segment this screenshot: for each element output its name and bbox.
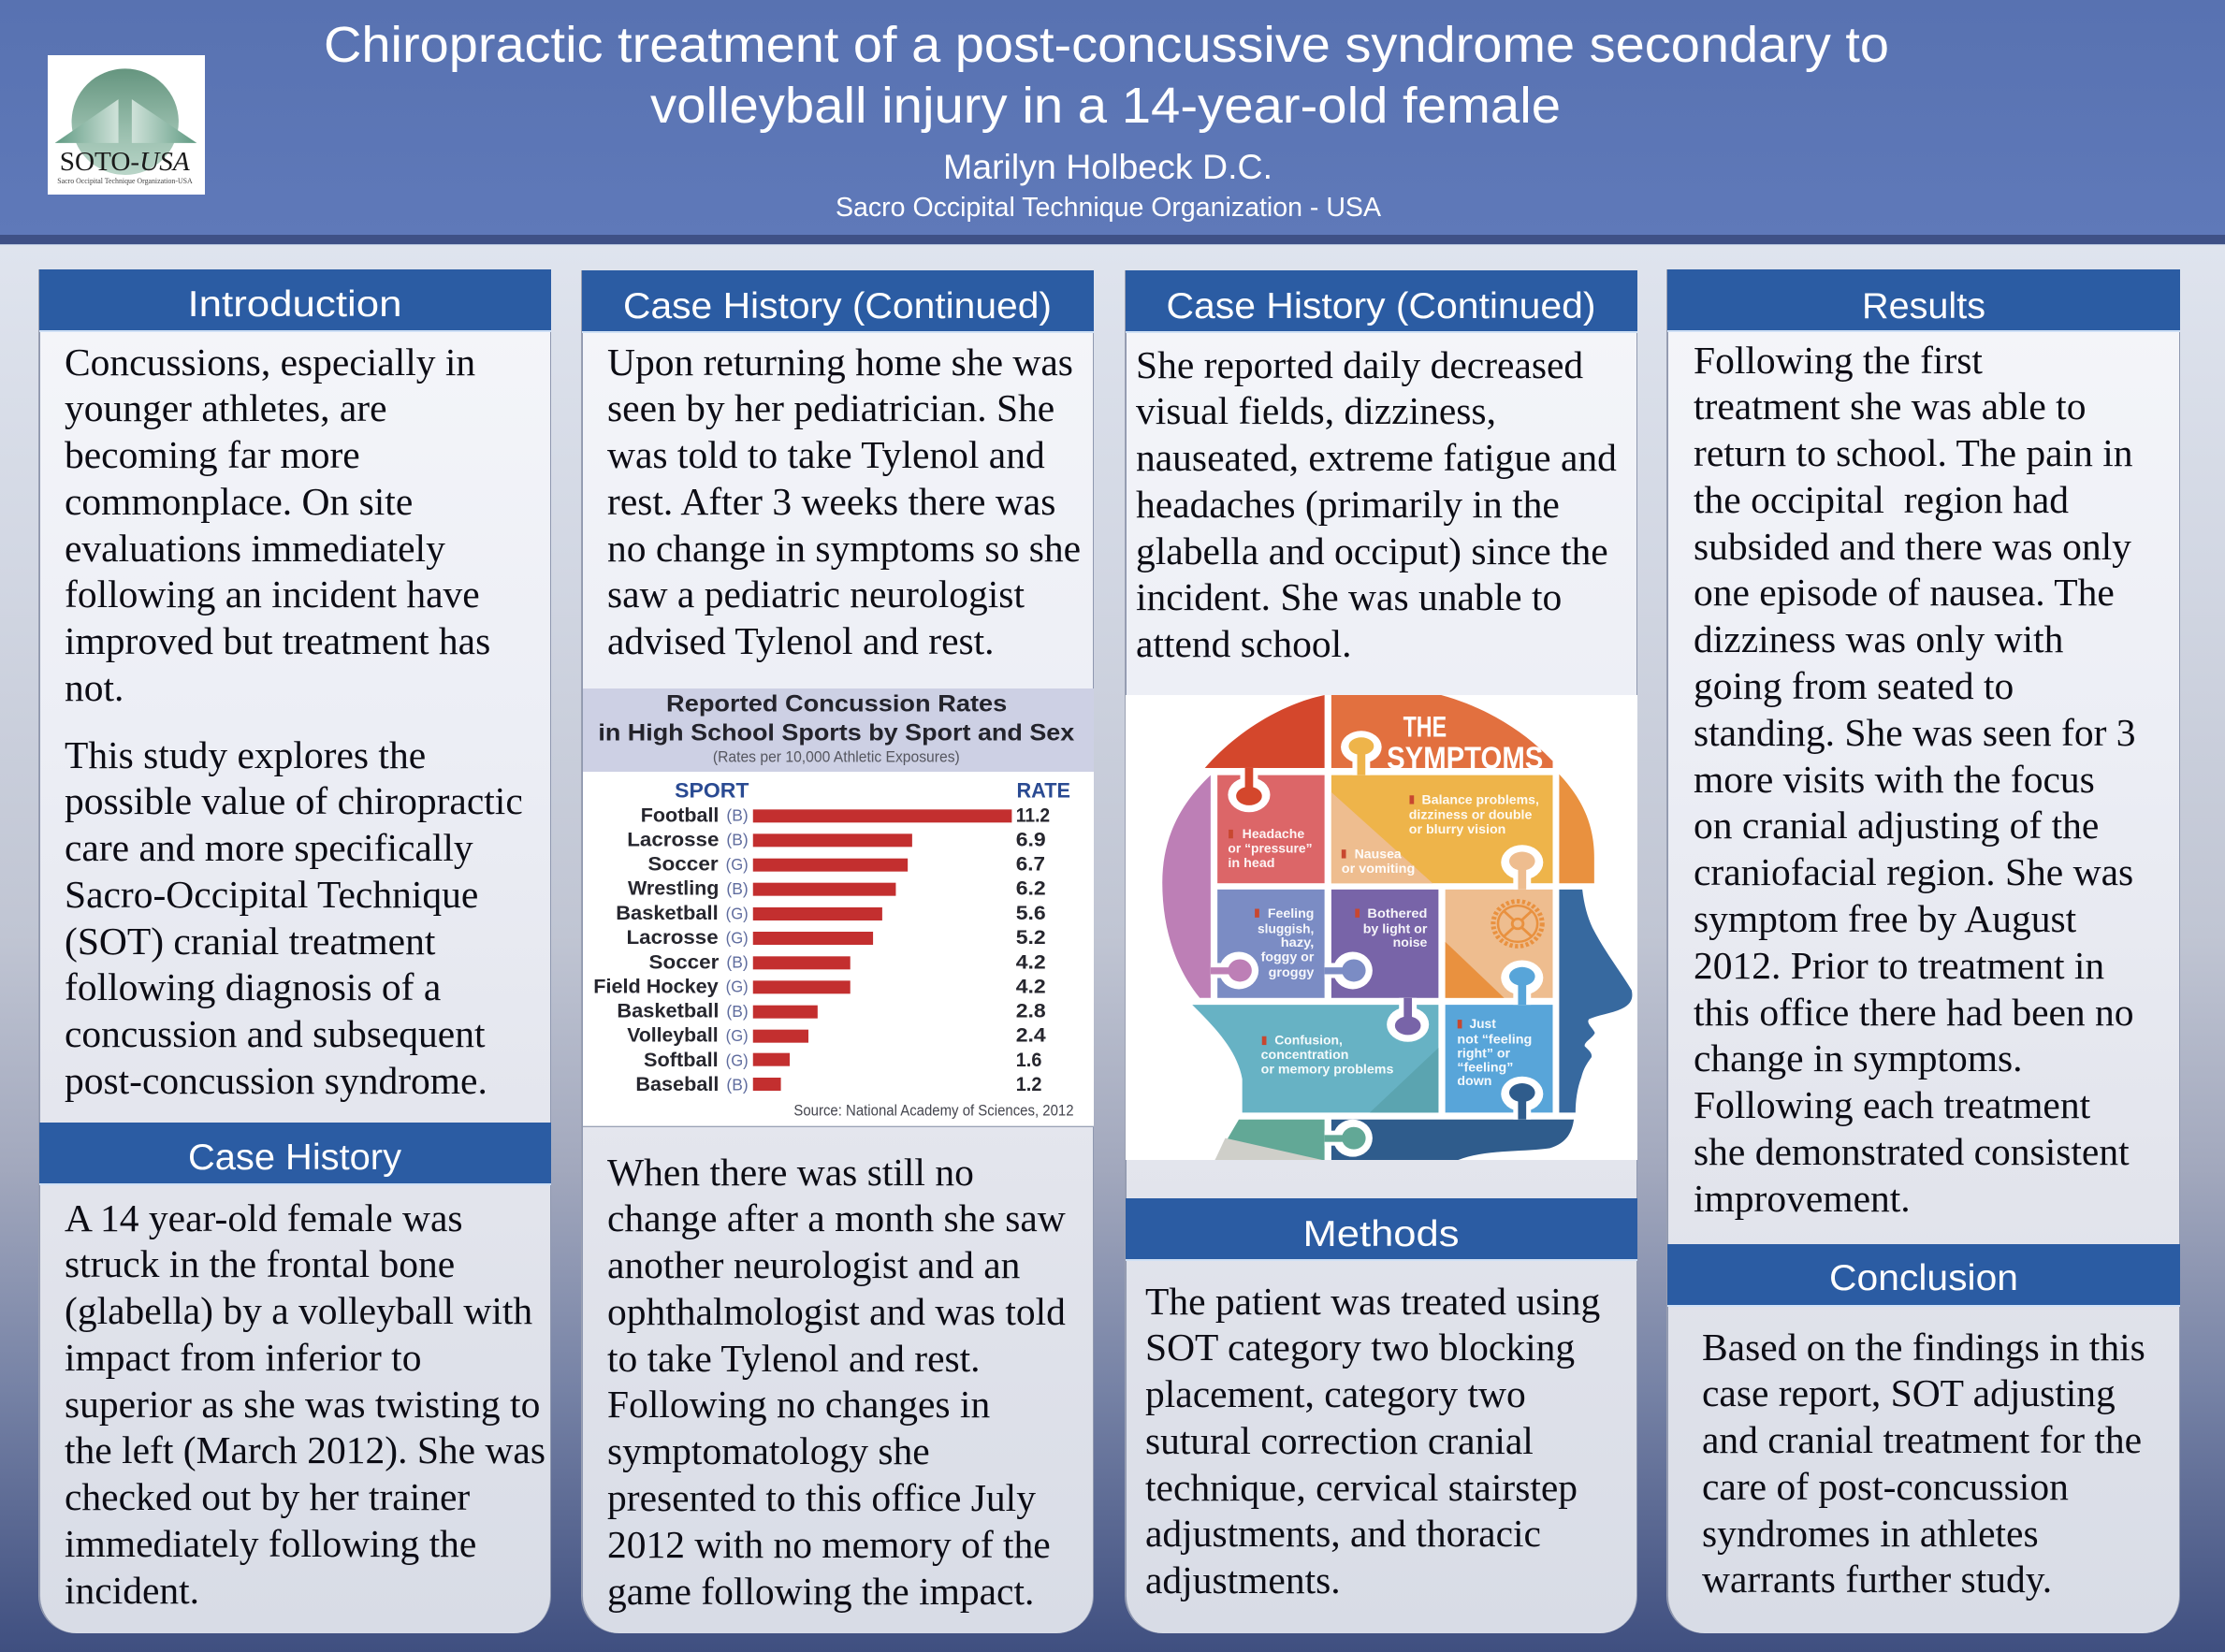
- symptom labels: “feeling”: [1457, 1061, 1513, 1075]
- text: methods: sutural correction cranial: [1145, 1419, 1534, 1462]
- text: results: the occipital region had: [1694, 478, 2069, 521]
- heading: Results: Results: [1862, 286, 1985, 326]
- text: introduction paragraph 1: commonplace. On site: [65, 480, 413, 523]
- heading: Case History (Continued): [582, 270, 1094, 333]
- heading: the symptoms: [1387, 710, 1543, 775]
- sport labels: Field Hockey: [593, 975, 719, 997]
- text: results: more visits with the focus: [1694, 758, 2095, 801]
- panel: column 1: [39, 269, 551, 1633]
- symptom labels: Bothered: [1367, 906, 1427, 921]
- text: introduction paragraph 1: not.: [65, 666, 124, 709]
- symptom labels: Confusion,: [1274, 1034, 1343, 1049]
- text: case history: [65, 1196, 545, 1612]
- heading: Case History (Continued): Case History (Continued): [1166, 286, 1596, 326]
- text: methods: SOT category two blocking: [1145, 1326, 1575, 1369]
- symptom labels: in head: [1228, 856, 1275, 871]
- sex labels: (G): [726, 1051, 749, 1069]
- text: case history continued 1: saw a pediatric neurologist: [607, 572, 1025, 616]
- rate values: 5.6: [1016, 902, 1046, 924]
- text: case history: A 14 year-old female was: [65, 1196, 463, 1239]
- text: case history continued 2: symptomatology she: [607, 1429, 930, 1472]
- heading: Methods: [1126, 1198, 1637, 1261]
- text: conclusion: warrants further study.: [1702, 1558, 2052, 1601]
- text: case history continued 3: She reported daily decreased: [1136, 342, 1583, 385]
- title and author block: [324, 17, 1889, 223]
- sex labels: (B): [726, 1076, 749, 1094]
- text: results: Following each treatment: [1694, 1083, 2090, 1126]
- heading: Conclusion: Conclusion: [1829, 1258, 2018, 1298]
- sex labels: (B): [726, 831, 749, 848]
- heading: Case History: [39, 1123, 551, 1185]
- heading: Introduction: Introduction: [187, 284, 402, 325]
- text: introduction paragraph 1: evaluations immediately: [65, 527, 445, 570]
- symptom labels: Headache: [1243, 828, 1304, 842]
- text: case history: superior as she was twisting to: [65, 1383, 540, 1426]
- text: methods: [1145, 1280, 1600, 1601]
- text: results: standing. She was seen for 3: [1694, 711, 2136, 754]
- text: case history continued 2: change after a month she saw: [607, 1196, 1066, 1239]
- text: introduction paragraph 2: possible value of chiropractic: [65, 779, 523, 822]
- symptom labels: or “pressure”: [1228, 842, 1313, 856]
- text: introduction paragraph 2: This study explores the: [65, 733, 426, 776]
- text: case history continued 1: no change in symptoms so she: [607, 527, 1081, 570]
- column headers: SPORT: [675, 778, 749, 802]
- sport labels: Lacrosse: [627, 828, 719, 850]
- rate values: 4.2: [1016, 950, 1046, 973]
- text: introduction paragraph 2: (SOT) cranial treatment: [65, 920, 435, 963]
- text: introduction paragraph 2: Sacro-Occipital Technique: [65, 873, 478, 916]
- symptom labels: dizziness or double: [1409, 808, 1532, 822]
- text: case history continued 1: [607, 341, 1081, 662]
- text: conclusion: Based on the findings in this: [1702, 1325, 2145, 1368]
- text: case history continued 1: advised Tylenol and rest.: [607, 619, 995, 662]
- text: introduction paragraph 2: following diagnosis of a: [65, 965, 441, 1008]
- symptom labels: by light or: [1363, 922, 1428, 936]
- sport labels: Soccer: [649, 950, 720, 973]
- header band: [0, 0, 2225, 235]
- text: results: this office there had been no: [1694, 991, 2134, 1034]
- author: Marilyn Holbeck D.C.: [943, 148, 1272, 186]
- rate values: 6.9: [1016, 828, 1046, 850]
- heading: Case History: Case History: [188, 1138, 401, 1178]
- text: case history: impact from inferior to: [65, 1336, 421, 1379]
- rate values: 6.7: [1016, 853, 1045, 875]
- symptom labels: right” or: [1457, 1047, 1510, 1062]
- sport labels: Basketball: [616, 902, 719, 924]
- panel: column 3: [1126, 270, 1637, 1633]
- text: results: Following the first: [1694, 339, 1983, 382]
- text: case history continued 2: 2012 with no memory of the: [607, 1523, 1051, 1566]
- panel: column 4: [1667, 269, 2180, 1633]
- text: results: [1694, 339, 2136, 1220]
- image: the symptoms puzzle head: [1126, 695, 1637, 1160]
- text: case history continued 2: Following no changes in: [607, 1383, 990, 1426]
- text: conclusion: case report, SOT adjusting: [1702, 1371, 2116, 1414]
- column headers: [675, 778, 1070, 802]
- sex labels: (B): [726, 806, 749, 824]
- text: case history continued 2: When there was still no: [607, 1151, 974, 1194]
- heading: Introduction: [39, 269, 551, 332]
- chart title: (Rates per 10,000 Athletic Exposures): [713, 747, 960, 765]
- symptom labels: or blurry vision: [1409, 822, 1505, 837]
- rate values: 11.2: [1016, 804, 1050, 826]
- text: case history: immediately following the: [65, 1522, 476, 1565]
- sport labels: Volleyball: [627, 1024, 719, 1046]
- symptom labels: foggy or: [1261, 950, 1315, 964]
- sport labels: Softball: [644, 1049, 719, 1071]
- text: case history continued 3: glabella and occiput) since the: [1136, 529, 1608, 572]
- symptom labels: Balance problems,: [1422, 793, 1539, 807]
- text: results: 2012. Prior to treatment in: [1694, 944, 2104, 987]
- text: methods: placement, category two: [1145, 1372, 1526, 1415]
- rate values: [1016, 804, 1050, 1095]
- text: introduction paragraph 2: post-concussion syndrome.: [65, 1059, 487, 1102]
- text: conclusion: care of post-concussion: [1702, 1465, 2069, 1508]
- text: case history: checked out by her trainer: [65, 1475, 470, 1518]
- text: introduction paragraph 1: becoming far more: [65, 433, 360, 476]
- sex labels: (G): [726, 978, 749, 995]
- chart title: Reported Concussion Rates: [666, 690, 1007, 717]
- text: case history continued 1: Upon returning home she was: [607, 341, 1073, 384]
- symptom labels: or memory problems: [1261, 1063, 1393, 1077]
- header divider strip: [0, 235, 2225, 245]
- text: case history continued 2: to take Tylenol and rest.: [607, 1337, 981, 1380]
- text: case history continued 2: ophthalmologist and was told: [607, 1290, 1066, 1333]
- text: results: going from seated to: [1694, 664, 2014, 707]
- text: methods: adjustments, and thoracic: [1145, 1512, 1541, 1555]
- sport labels: Soccer: [647, 853, 719, 875]
- heading: Conclusion: [1667, 1244, 2180, 1307]
- text: introduction paragraph 1: improved but treatment has: [65, 619, 490, 662]
- text: results: on cranial adjusting of the: [1694, 804, 2099, 847]
- text: conclusion: [1702, 1325, 2145, 1601]
- text: results: dizziness was only with: [1694, 617, 2063, 660]
- symptom labels: noise: [1393, 936, 1427, 950]
- text: introduction paragraph 2: concussion and subsequent: [65, 1012, 486, 1055]
- sex labels: (B): [726, 953, 749, 971]
- symptom labels: sluggish,: [1258, 922, 1314, 936]
- rate values: 4.2: [1016, 975, 1046, 997]
- sex labels: (B): [726, 1003, 749, 1021]
- text: case history: struck in the frontal bone: [65, 1242, 455, 1285]
- rate values: 1.2: [1016, 1073, 1041, 1095]
- text: case history continued 2: another neurologist and an: [607, 1243, 1020, 1286]
- rate values: 6.2: [1016, 877, 1046, 899]
- symptom labels: [1228, 793, 1539, 1089]
- column headers: RATE: [1016, 778, 1070, 802]
- chart title: [598, 690, 1075, 765]
- rate values: 5.2: [1016, 926, 1046, 949]
- title line 2: volleyball injury in a 14-year-old female: [650, 78, 1561, 134]
- symptom labels: Feeling: [1268, 906, 1314, 921]
- text: case history continued 1: rest. After 3 weeks there was: [607, 480, 1055, 523]
- text: case history: the left (March 2012). She was: [65, 1428, 545, 1471]
- text: case history continued 2: presented to this office July: [607, 1476, 1036, 1519]
- rate values: 2.4: [1016, 1024, 1046, 1046]
- text: introduction paragraph 1: Concussions, especially in: [65, 341, 475, 384]
- text: case history: (glabella) by a volleyball with: [65, 1289, 532, 1332]
- panel: column 2: [582, 270, 1094, 1633]
- text: case history continued 1: was told to take Tylenol and: [607, 433, 1045, 476]
- text: introduction paragraph 2: care and more specifically: [65, 826, 473, 869]
- rate values: 1.6: [1016, 1049, 1041, 1071]
- sport labels: Wrestling: [628, 877, 719, 899]
- affiliation: Sacro Occipital Technique Organization - USA: [836, 193, 1382, 223]
- symptom labels: not “feeling: [1457, 1033, 1532, 1047]
- text: results: change in symptoms.: [1694, 1036, 2023, 1080]
- text: methods: adjustments.: [1145, 1558, 1341, 1601]
- sport labels: Baseball: [635, 1073, 719, 1095]
- symptom labels: or vomiting: [1342, 862, 1415, 877]
- symptom bullets: [1229, 795, 1462, 1045]
- text: case history: incident.: [65, 1569, 199, 1612]
- rate values: 2.8: [1016, 1000, 1046, 1022]
- heading: Case History (Continued): [1126, 270, 1637, 333]
- text: case history continued 3: incident. She was unable to: [1136, 575, 1562, 618]
- heading: Methods: Methods: [1302, 1214, 1460, 1254]
- title line 1: Chiropractic treatment of a post-concussive syndrome secondary to: [324, 17, 1889, 73]
- text: case history continued 2: game following the impact.: [607, 1570, 1034, 1613]
- text: case history continued 3: [1136, 342, 1617, 665]
- text: conclusion: syndromes in athletes: [1702, 1512, 2039, 1555]
- heading: the symptoms: THE: [1403, 710, 1447, 743]
- logo: SOTO-USA: [48, 55, 205, 195]
- text: introduction paragraph 1: younger athletes, are: [65, 386, 387, 429]
- text: case history continued 3: visual fields, dizziness,: [1136, 389, 1496, 432]
- heading: Results: [1667, 269, 2180, 332]
- sport labels: Lacrosse: [627, 926, 719, 949]
- text: results: improvement.: [1694, 1177, 1911, 1220]
- symptom labels: Just: [1469, 1017, 1496, 1032]
- bars: [753, 809, 1011, 1091]
- text: case history continued 2: [607, 1151, 1066, 1613]
- text: case history continued 3: attend school.: [1136, 622, 1351, 665]
- text: introduction paragraph 2: [65, 733, 523, 1102]
- text: results: return to school. The pain in: [1694, 431, 2132, 474]
- text: results: treatment she was able to: [1694, 384, 2086, 427]
- sex labels: (G): [726, 856, 749, 874]
- sport labels: Football: [641, 804, 719, 826]
- sex labels: (G): [726, 929, 749, 947]
- sex labels: [726, 806, 749, 1094]
- text: methods: technique, cervical stairstep: [1145, 1466, 1578, 1509]
- text: case history continued 3: nauseated, extreme fatigue and: [1136, 436, 1617, 479]
- sex labels: (B): [726, 880, 749, 898]
- text: results: subsided and there was only: [1694, 525, 2131, 568]
- bar chart: reported concussion rates: [583, 688, 1094, 1127]
- text: results: craniofacial region. She was: [1694, 850, 2133, 893]
- sex labels: (G): [726, 1027, 749, 1045]
- sport labels: [593, 804, 720, 1095]
- heading: Case History (Continued): Case History (Continued): [623, 286, 1052, 326]
- symptom labels: groggy: [1269, 966, 1315, 980]
- chart title: in High School Sports by Sport and Sex: [598, 719, 1075, 746]
- text: case history continued 1: seen by her pediatrician. She: [607, 386, 1054, 429]
- text: results: one episode of nausea. The: [1694, 571, 2115, 614]
- symptom labels: concentration: [1261, 1049, 1348, 1063]
- text: conclusion: and cranial treatment for the: [1702, 1418, 2142, 1461]
- symptom labels: Nausea: [1355, 848, 1403, 862]
- icon: gear: [1493, 902, 1542, 946]
- heading: the symptoms: SYMPTOMS: [1387, 741, 1543, 775]
- symptom labels: down: [1457, 1075, 1491, 1089]
- puzzle tabs: [1211, 731, 1543, 1157]
- text: introduction paragraph 1: [65, 341, 490, 709]
- sex labels: (G): [726, 905, 749, 922]
- symptom labels: hazy,: [1281, 936, 1314, 950]
- text: introduction paragraph 1: following an incident have: [65, 572, 480, 616]
- puzzle pieces: [1162, 695, 1632, 1160]
- text: results: symptom free by August: [1694, 897, 2076, 940]
- text: methods: The patient was treated using: [1145, 1280, 1600, 1323]
- text: results: she demonstrated consistent: [1694, 1130, 2130, 1173]
- text: case history continued 3: headaches (primarily in the: [1136, 483, 1560, 526]
- sport labels: Basketball: [617, 1000, 719, 1022]
